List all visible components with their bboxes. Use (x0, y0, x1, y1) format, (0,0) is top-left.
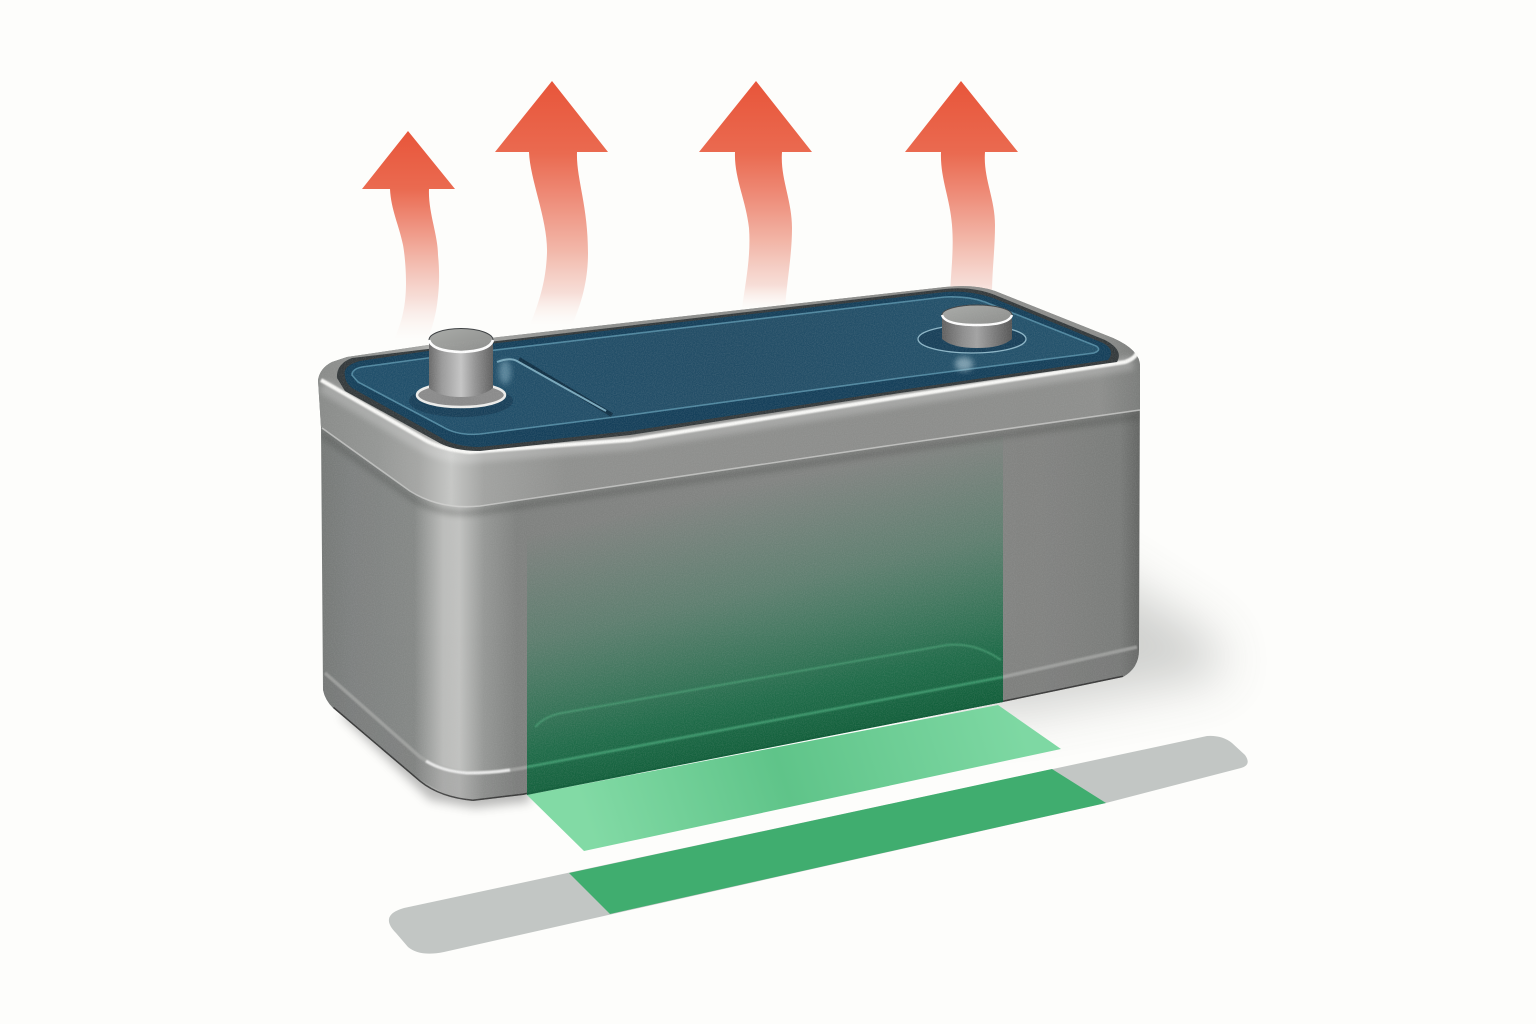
heat arrow 4 (905, 81, 1018, 295)
right terminal cap edge (942, 315, 1012, 325)
heat arrow 1 (362, 131, 455, 338)
green tint (527, 436, 1003, 795)
illustration: battery with heat arrows and green footprint (318, 81, 1248, 954)
inner base outline (535, 645, 1001, 727)
lid recess divider (519, 359, 612, 415)
dark lid gasket (337, 288, 1119, 451)
battery (318, 286, 1145, 815)
right terminal (918, 305, 1026, 353)
bar: green segment (569, 769, 1106, 914)
rim highlight (321, 352, 1137, 452)
heat arrow 3 (699, 81, 812, 308)
top rim band (318, 286, 1140, 506)
rim glow (323, 363, 1133, 456)
heat arrow 2 (495, 81, 608, 325)
green floor footprint (527, 705, 1061, 851)
ground shadow (340, 560, 1225, 808)
right terminal cap (942, 305, 1012, 325)
right terminal post (942, 315, 1012, 348)
left terminal cap (429, 328, 493, 352)
left terminal base ring (417, 383, 505, 407)
left terminal collar (409, 385, 513, 417)
bottom rim band (320, 416, 1145, 815)
bottom band highlight through green (527, 677, 1003, 767)
scale bar (389, 736, 1248, 954)
right terminal collar (918, 325, 1026, 353)
left terminal (409, 328, 513, 417)
rim seam (322, 410, 1140, 507)
lid highlight near left post (499, 360, 511, 384)
battery body (318, 286, 1140, 801)
green overlay on battery (527, 436, 1003, 795)
shadow under rim (321, 416, 1140, 513)
lid recess highlight (497, 359, 606, 411)
lid highlight near right post (955, 357, 973, 371)
bar: grey track (389, 736, 1248, 954)
lid (345, 292, 1111, 447)
left terminal cap edge (429, 340, 493, 352)
lid inner panel (352, 297, 1099, 434)
left terminal post (429, 340, 493, 397)
surface grain (310, 280, 1150, 810)
